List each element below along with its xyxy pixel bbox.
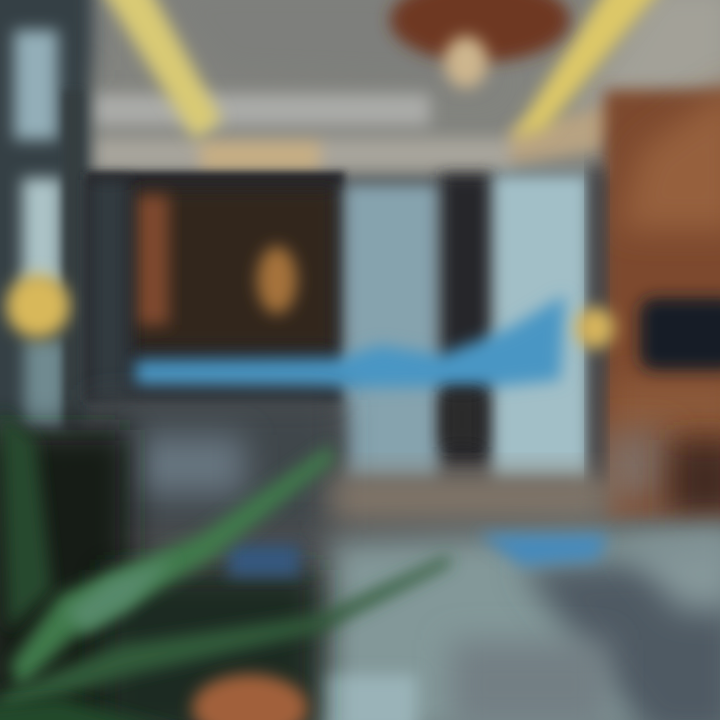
terracotta pot — [192, 674, 308, 720]
left yellow glow — [6, 274, 70, 338]
dark back window — [85, 172, 345, 402]
right yellow glow — [575, 307, 615, 349]
hanging lamp in window — [257, 246, 297, 314]
right wood wall — [600, 80, 720, 520]
left window columns — [0, 0, 90, 430]
pendant lamp — [390, 0, 570, 88]
bed — [320, 525, 720, 720]
middle dark zone — [90, 392, 610, 530]
yellow ceiling strip right — [510, 0, 668, 140]
yellow ceiling strip left — [96, 0, 222, 140]
blue blanket — [478, 534, 608, 566]
ceiling — [0, 0, 720, 175]
dark wall screen — [640, 298, 720, 370]
plant foliage — [0, 410, 450, 720]
light curtains — [344, 165, 604, 485]
ceiling light band — [90, 94, 650, 172]
blue ribbon — [135, 295, 565, 388]
